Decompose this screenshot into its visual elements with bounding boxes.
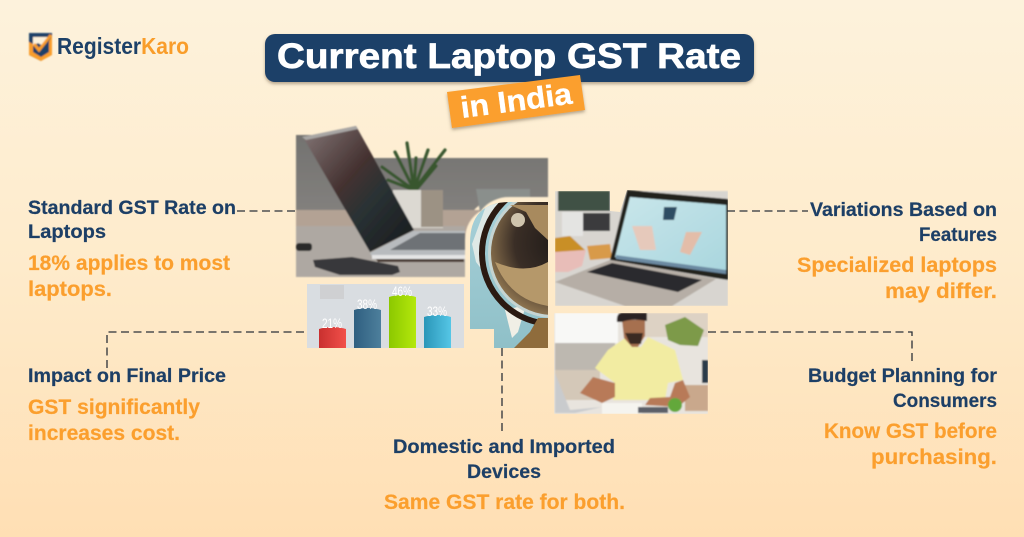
photo: laptop on desk with plant [296, 126, 548, 277]
text: standard GST rate: laptops. [28, 278, 112, 301]
text: budget planning [808, 366, 998, 469]
text: standard GST rate: 18% applies to most [28, 252, 230, 275]
bar 38%: 38% [357, 296, 377, 312]
text: domestic and imported: Same GST rate for both. [384, 491, 625, 514]
plant leaves [382, 143, 445, 190]
bar 21%: 21% [322, 315, 342, 331]
text: budget planning: Budget Planning for [808, 366, 998, 387]
text: impact on final price: GST significantly [28, 396, 200, 419]
title banner: Current Laptop GST Rate [277, 37, 741, 76]
desk object [296, 243, 312, 251]
text: variations based on features: Variations Based on [810, 200, 997, 221]
plant pot [393, 190, 443, 228]
text: impact on final price [28, 366, 226, 445]
title banner [265, 34, 754, 82]
text: impact on final price: Impact on Final Price [28, 366, 226, 387]
hair [617, 313, 647, 322]
text: domestic and imported: Devices [467, 462, 541, 483]
text: impact on final price: increases cost. [28, 422, 180, 445]
connector lines [107, 211, 912, 432]
desk [296, 210, 482, 277]
arms [580, 377, 615, 403]
text: standard GST rate: Laptops [28, 222, 106, 243]
bar 46% [389, 283, 416, 348]
badge: in India: in India [459, 78, 574, 125]
laptop base [370, 231, 465, 257]
bar chart [307, 283, 464, 348]
text: variations based on features: Specialized laptops [797, 254, 997, 277]
text: budget planning: purchasing. [871, 446, 997, 469]
text: variations based on features [797, 200, 997, 303]
photo: laptop on table [555, 190, 728, 306]
laptop on desk [554, 375, 598, 414]
logo wordmark: RegisterKaro [57, 33, 189, 59]
photo: man calculating [554, 313, 708, 414]
text: standard GST rate [28, 198, 236, 301]
bar 21% [319, 315, 346, 348]
laptop lid [303, 126, 414, 252]
logo: RegisterKaro [29, 33, 189, 61]
bar 33%: 33% [427, 303, 447, 319]
text: domestic and imported: Domestic and Imported [393, 437, 615, 458]
bar 33% [424, 303, 451, 348]
shirt [595, 337, 683, 400]
text: variations based on features: Features [919, 225, 997, 246]
cup [476, 189, 530, 212]
bar 46%: 46% [392, 283, 412, 299]
laptop screen [610, 190, 728, 280]
text: variations based on features: may differ. [885, 280, 997, 303]
text: budget planning: Know GST before [824, 420, 997, 443]
text: standard GST rate: Standard GST Rate on [28, 198, 236, 219]
text: budget planning: Consumers [893, 391, 997, 412]
icon: shield check [29, 33, 52, 61]
beard [625, 333, 643, 344]
laptop keyboard base [555, 260, 716, 306]
badge: in India [447, 75, 585, 128]
neck and face [622, 320, 645, 347]
bowls of food [555, 250, 586, 272]
text: domestic and imported [384, 437, 625, 514]
photo: globe [470, 202, 548, 348]
phone [313, 257, 400, 275]
bar 38% [354, 296, 381, 348]
